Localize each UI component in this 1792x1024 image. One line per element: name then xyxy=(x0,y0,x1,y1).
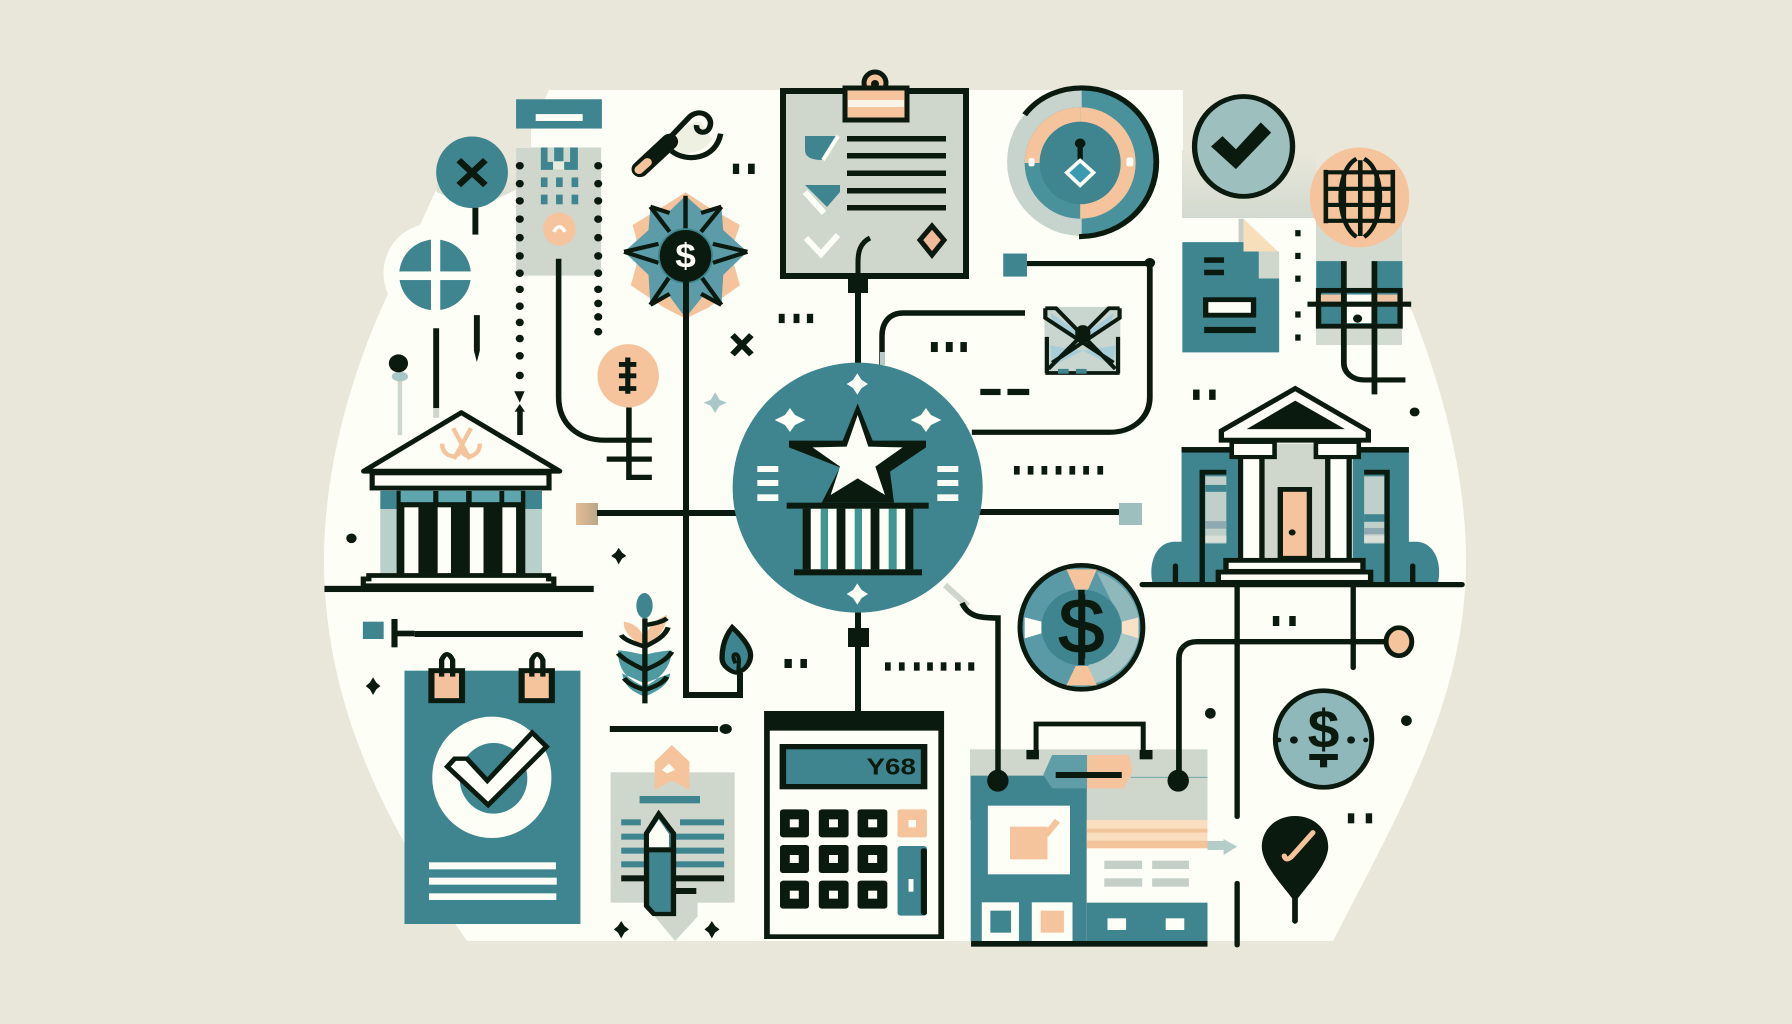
colonnade xyxy=(787,503,929,575)
sparkles xyxy=(757,373,958,605)
banner: top small teal label xyxy=(516,99,602,129)
dotted column xyxy=(1295,230,1301,341)
connector: teal node to bus xyxy=(972,254,1155,432)
icon: peach token xyxy=(597,344,659,407)
white backdrop shape xyxy=(324,90,1466,941)
icon: dollar coin small xyxy=(1275,691,1372,787)
dot xyxy=(346,533,357,543)
sparkles xyxy=(366,548,720,938)
icon: map pin with tick xyxy=(1262,816,1328,924)
icon: cross circle on pin xyxy=(436,136,508,235)
small marks xyxy=(612,335,751,564)
pencil xyxy=(647,814,673,914)
icon: dollar coin large xyxy=(1020,565,1143,689)
panel: building tower with dotted columns xyxy=(516,147,602,379)
connector: right spoke xyxy=(975,503,1142,525)
display: Y68 xyxy=(867,755,916,780)
connector: top right bus with peach node xyxy=(1179,585,1412,945)
icon: whistle xyxy=(639,113,721,170)
icon: dollar medallion flower: $ xyxy=(675,236,696,275)
connector: vertical stem from flower to leaf xyxy=(686,276,740,695)
connector: hook line xyxy=(880,313,1025,365)
arrow: small double arrow xyxy=(514,391,525,435)
icon: flame leaf xyxy=(722,627,751,673)
icon: central star badge xyxy=(733,363,983,613)
icon: leaf plant xyxy=(618,593,672,703)
decorative pins and strokes xyxy=(389,315,480,435)
panel: approval notepad xyxy=(404,654,580,924)
panel: document with pencil xyxy=(611,745,735,941)
dots xyxy=(1205,708,1412,726)
icon: dollar coin large: $ xyxy=(1059,583,1104,669)
icon: globe grid xyxy=(1310,147,1409,247)
star outline xyxy=(789,403,926,503)
dashes xyxy=(733,164,813,323)
icon: map crossing xyxy=(1307,261,1411,394)
panel: calculator xyxy=(765,712,943,937)
icon: quartered circle xyxy=(396,237,475,313)
connector: left spoke xyxy=(576,503,747,525)
connector: T line xyxy=(363,619,583,647)
icon: left bank building xyxy=(324,413,594,592)
icon: right bank building xyxy=(1139,389,1465,587)
dot xyxy=(1410,407,1420,416)
dashes xyxy=(784,659,807,668)
panel: clipboard checklist xyxy=(783,72,966,280)
display xyxy=(783,747,924,787)
panel: screen dashboard xyxy=(970,724,1237,947)
icon: dollar medallion flower xyxy=(624,192,747,319)
connector: tower to bracket xyxy=(559,259,652,477)
icon: donut gauge xyxy=(1007,88,1156,237)
connector: pointer line to screen xyxy=(945,585,998,782)
connector: pin line xyxy=(610,724,732,734)
binder clips xyxy=(431,654,552,701)
grey backing panels xyxy=(436,150,1402,345)
dashes xyxy=(931,342,1216,475)
connector: centre vertical xyxy=(848,279,869,712)
dashes xyxy=(885,616,1372,823)
icon: crossed envelope xyxy=(1045,307,1120,374)
panel: document with folded corner xyxy=(1182,219,1279,352)
keypad xyxy=(780,809,927,916)
icon: dollar coin small: $ xyxy=(1308,699,1339,759)
icon: check circle xyxy=(1195,97,1293,196)
